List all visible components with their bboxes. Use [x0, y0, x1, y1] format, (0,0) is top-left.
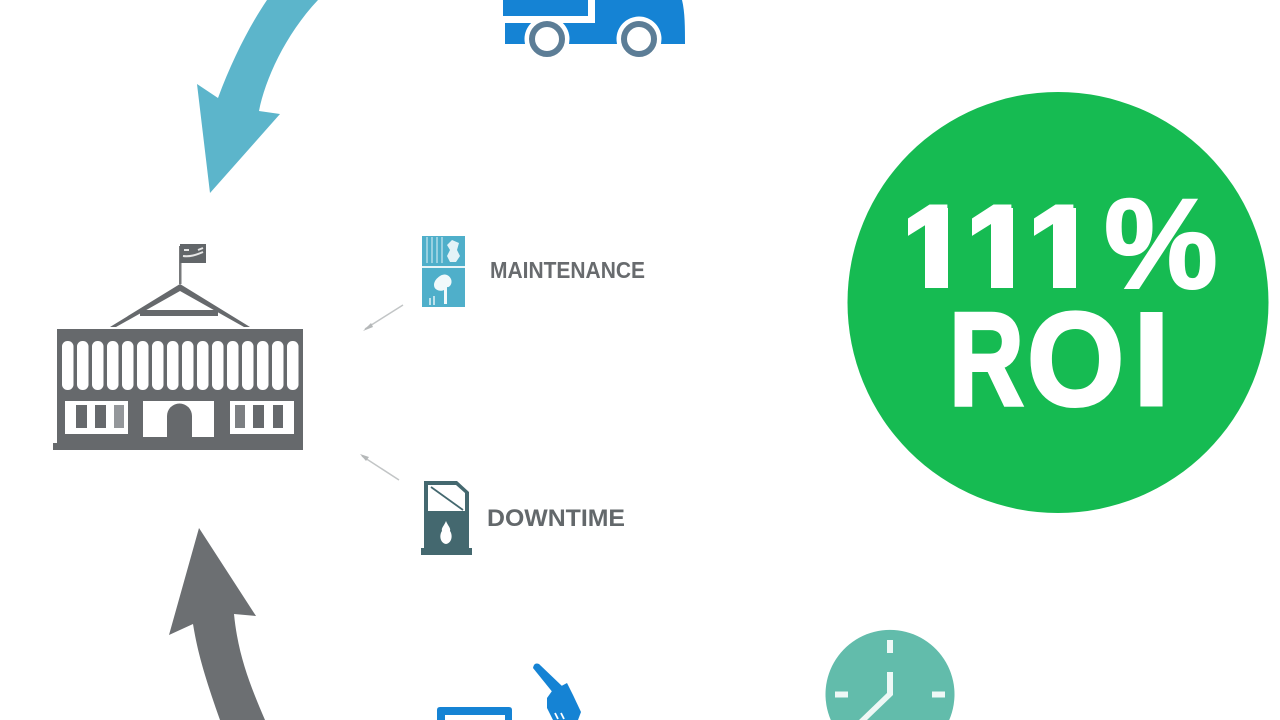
icon: blue delivery truck — [503, 0, 685, 62]
ROI label: I — [1133, 286, 1170, 434]
flag — [179, 244, 206, 284]
icon: government building — [53, 244, 303, 450]
arrow: thin pointer toward building, lower — [360, 454, 399, 480]
icon: downtime fuel gauge — [421, 481, 472, 555]
entrance — [143, 401, 214, 437]
ROI label: R — [949, 286, 1024, 434]
ROI percentage: 1 — [1028, 181, 1093, 312]
icon: blue screen, partially cropped — [437, 707, 512, 720]
label: maintenance: MAINTENANCE — [490, 257, 645, 283]
right windows — [230, 401, 294, 434]
arrow: thin pointer toward building, upper — [363, 305, 403, 331]
label: downtime: DOWNTIME — [487, 505, 625, 532]
arrow: gray curved arrow pointing to building — [169, 528, 265, 720]
ROI percentage: 1 — [902, 181, 967, 312]
left windows — [65, 401, 128, 434]
ROI percentage — [895, 173, 1218, 316]
ROI label — [949, 285, 1170, 434]
ROI label: O — [1027, 285, 1124, 434]
building body — [53, 329, 303, 450]
icon: maintenance — [422, 236, 465, 307]
columns — [62, 341, 298, 390]
roof — [110, 284, 250, 327]
icon: clock — [826, 630, 954, 720]
icon: fuel nozzle — [533, 664, 581, 720]
ROI percentage: % — [1104, 173, 1218, 316]
ROI percentage: 1 — [966, 181, 1031, 312]
callout: 111% ROI green circle — [848, 92, 1268, 513]
arrow: teal curved arrow pointing to building — [197, 0, 318, 193]
